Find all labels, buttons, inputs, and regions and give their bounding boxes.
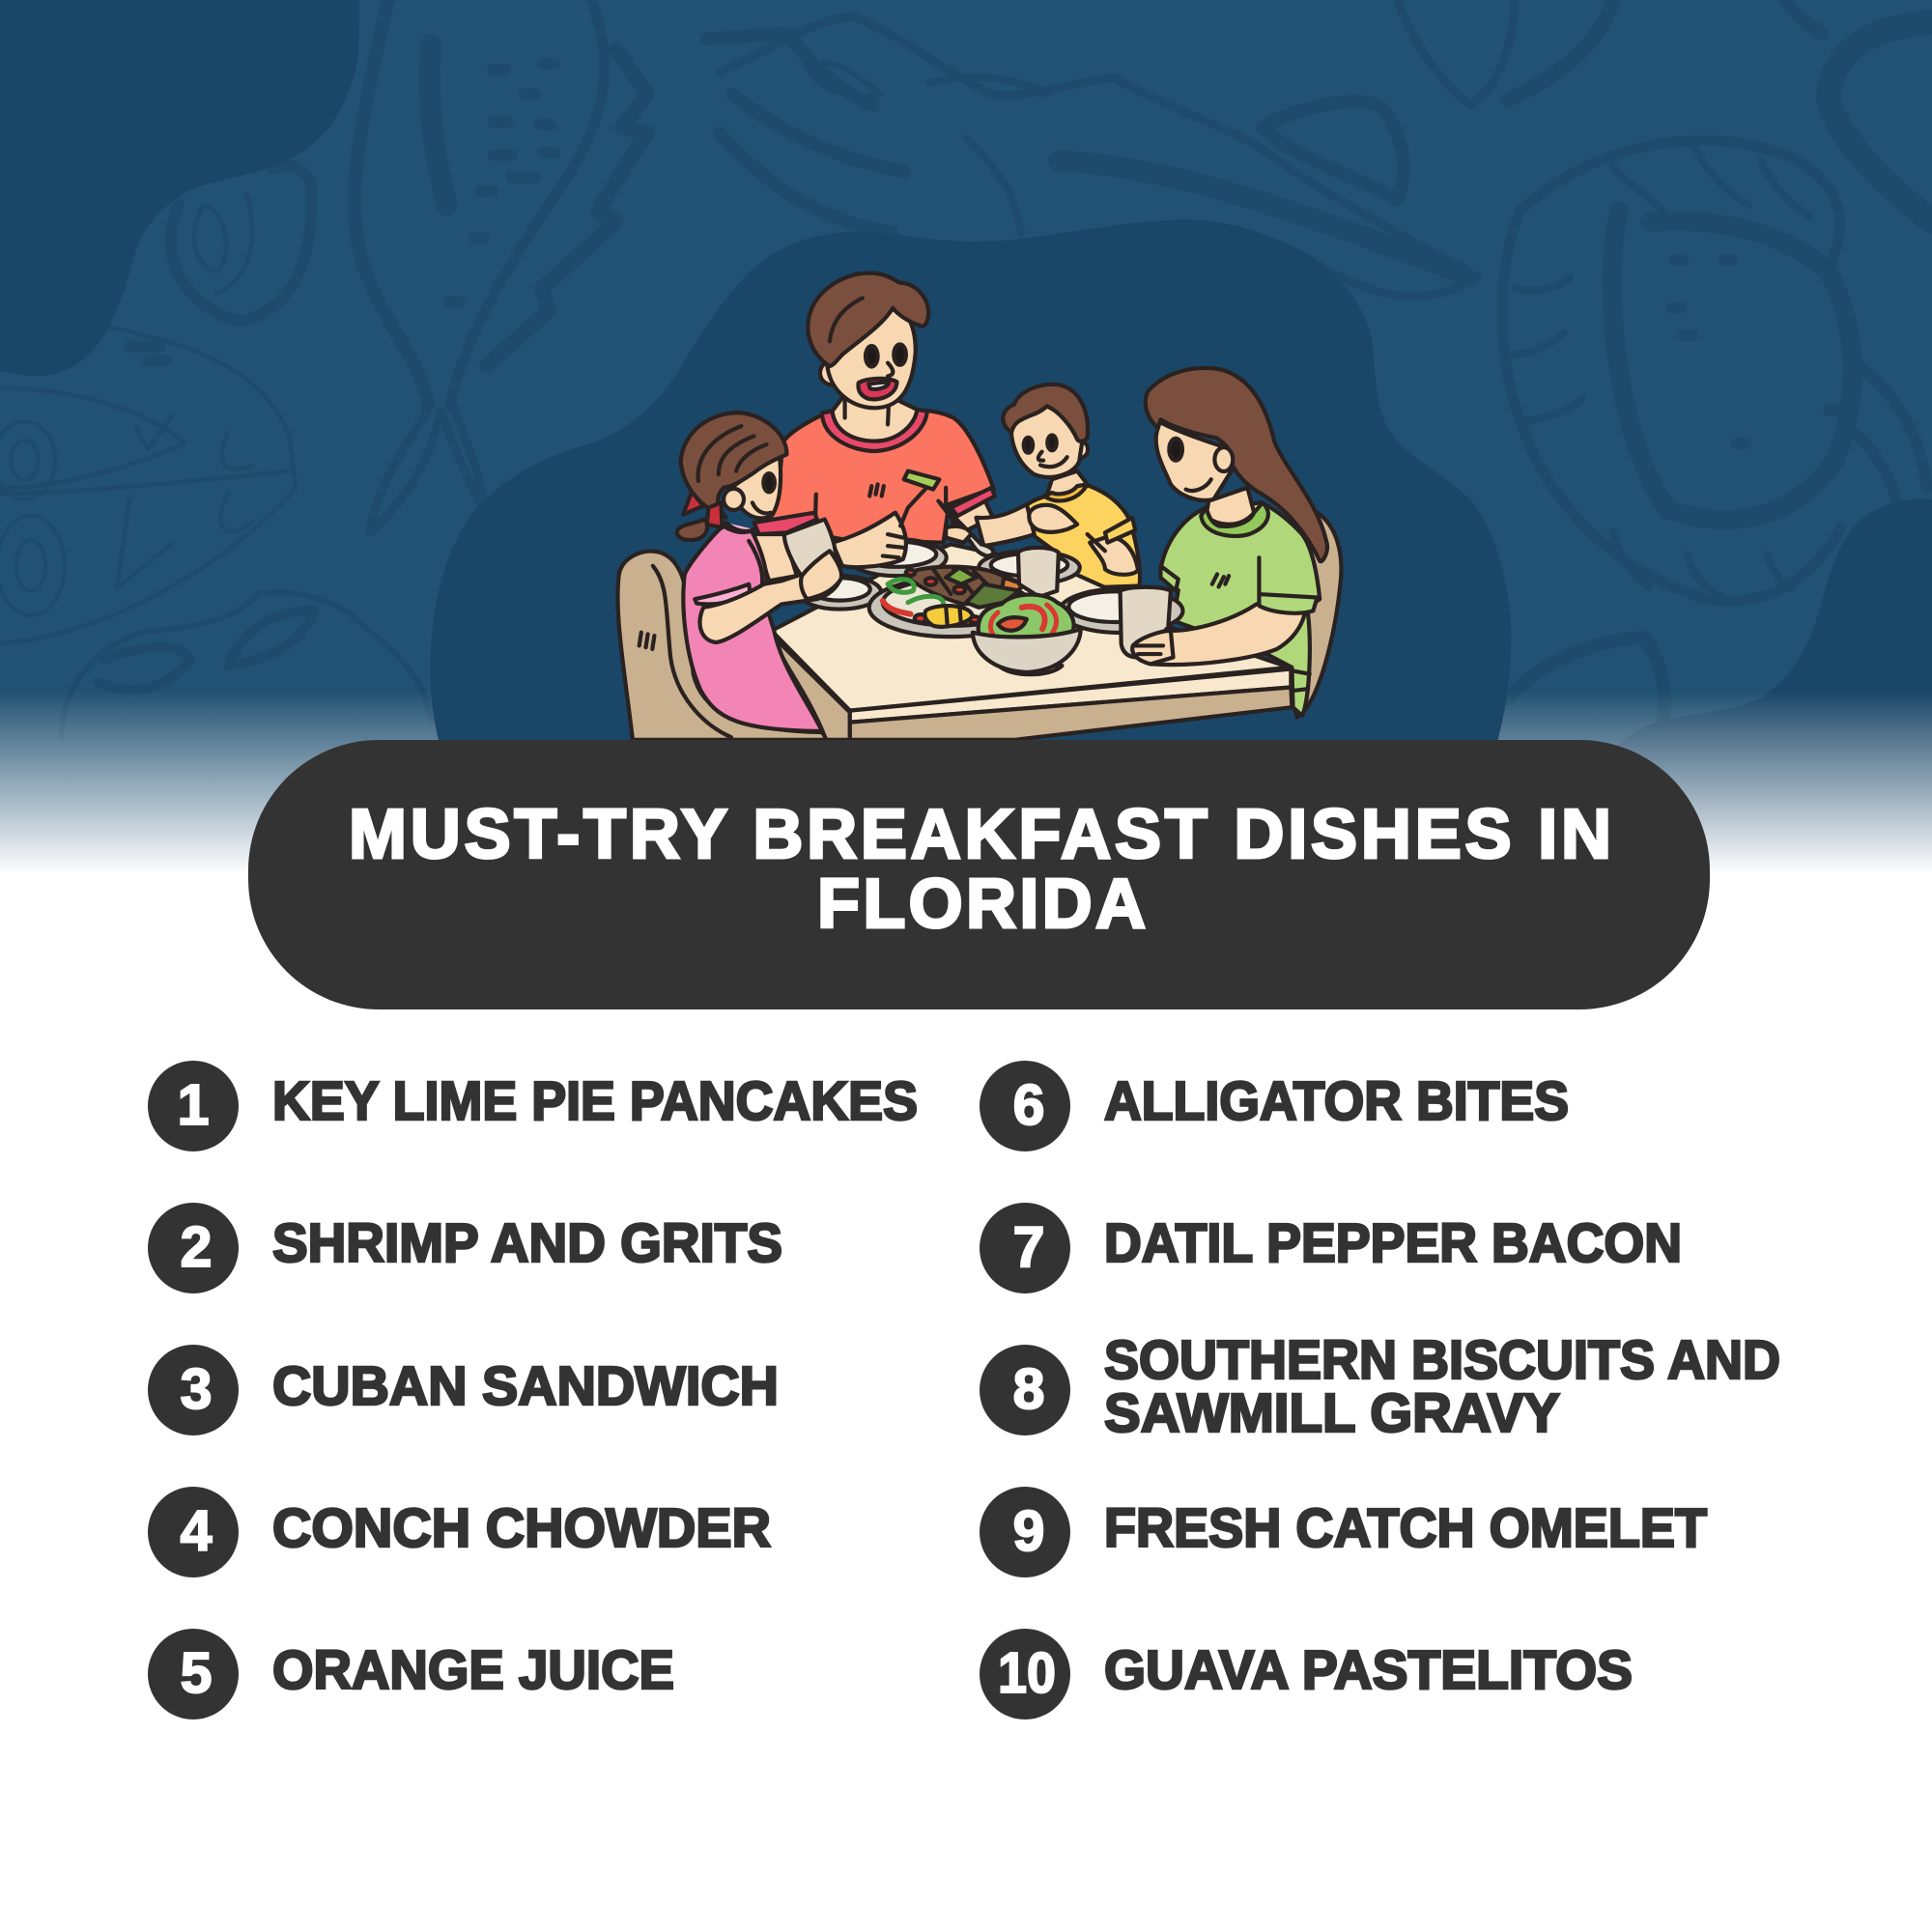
item 6 badge: 6 bbox=[1013, 1073, 1044, 1137]
title pill bbox=[248, 740, 1710, 1009]
item 1 label: KEY LIME PIE PANCAKES bbox=[272, 1070, 918, 1132]
item 2 badge bbox=[148, 1203, 239, 1293]
item 3 badge: 3 bbox=[181, 1357, 212, 1421]
item 6 badge bbox=[980, 1061, 1070, 1151]
centre blob behind family bbox=[430, 219, 1511, 742]
motif: shrimp bottom left bbox=[62, 592, 431, 737]
item 7 badge: 7 bbox=[1013, 1215, 1044, 1279]
left chair bbox=[617, 552, 827, 740]
item 9 badge: 9 bbox=[1013, 1499, 1044, 1563]
girl bbox=[677, 412, 841, 731]
item 4 badge bbox=[148, 1487, 239, 1577]
table bbox=[772, 544, 1292, 740]
item 8 label: SOUTHERN BISCUITS AND bbox=[1104, 1329, 1780, 1391]
item 2 badge: 2 bbox=[181, 1215, 212, 1279]
boy bbox=[977, 384, 1140, 587]
boy's glass bbox=[1018, 548, 1059, 597]
item 5 badge bbox=[148, 1629, 239, 1719]
item 3 badge bbox=[148, 1345, 239, 1435]
motif: shell top right bbox=[1397, 0, 1932, 222]
motif: long fish top centre bbox=[707, 16, 1477, 297]
background pattern: seafood line drawings bbox=[0, 0, 1932, 737]
item 7 badge bbox=[980, 1203, 1070, 1293]
item 1 badge: 1 bbox=[178, 1073, 209, 1137]
item 8 label: SAWMILL GRAVY bbox=[1104, 1382, 1560, 1444]
father's fork hand bbox=[833, 471, 993, 567]
title line 2: FLORIDA bbox=[817, 866, 1146, 943]
item 5 badge: 5 bbox=[181, 1641, 212, 1705]
list: dishes left column bbox=[148, 1061, 918, 1719]
mother's arm and glass bbox=[1121, 566, 1318, 665]
item 10 badge: 10 bbox=[998, 1641, 1056, 1705]
item 8 label bbox=[1104, 1329, 1780, 1444]
pill background bbox=[248, 740, 1710, 1009]
mother hair and head bbox=[1146, 368, 1327, 561]
motif: fish bbox=[355, 0, 647, 532]
salad bowl bbox=[973, 594, 1081, 674]
title line 1: MUST-TRY BREAKFAST DISHES IN bbox=[349, 796, 1611, 873]
item 5 label: ORANGE JUICE bbox=[272, 1639, 674, 1701]
motif: crab at right bbox=[1502, 140, 1927, 726]
item 1 badge bbox=[148, 1061, 239, 1151]
item 2 label: SHRIMP AND GRITS bbox=[272, 1212, 782, 1274]
list: dishes right column bbox=[980, 1061, 1780, 1719]
plates bbox=[798, 539, 1182, 633]
blue header background bbox=[0, 0, 1932, 874]
item 9 badge bbox=[980, 1487, 1070, 1577]
item 8 badge: 8 bbox=[1013, 1357, 1044, 1421]
item 6 label: ALLIGATOR BITES bbox=[1104, 1070, 1569, 1132]
item 10 label: GUAVA PASTELITOS bbox=[1104, 1639, 1633, 1701]
item 9 label: FRESH CATCH OMELET bbox=[1104, 1497, 1707, 1559]
right chair bbox=[1287, 513, 1341, 717]
father bbox=[756, 273, 995, 543]
mother body bbox=[1160, 488, 1320, 716]
motif: clam at left bbox=[171, 165, 311, 322]
platter of steak and vegetables bbox=[869, 567, 1033, 637]
item 7 label: DATIL PEPPER BACON bbox=[1104, 1212, 1682, 1274]
illustration: family eating breakfast bbox=[617, 273, 1341, 740]
item 4 badge: 4 bbox=[181, 1499, 213, 1563]
white fade at bottom of header bbox=[0, 691, 1932, 874]
corner blob: bottom right bbox=[1584, 499, 1932, 869]
item 3 label: CUBAN SANDWICH bbox=[272, 1355, 779, 1417]
item 4 label: CONCH CHOWDER bbox=[272, 1497, 771, 1559]
motif: salmon steak bbox=[0, 327, 296, 643]
corner blob: top left bbox=[0, 0, 359, 376]
item 10 badge bbox=[980, 1629, 1070, 1719]
item 8 badge bbox=[980, 1345, 1070, 1435]
